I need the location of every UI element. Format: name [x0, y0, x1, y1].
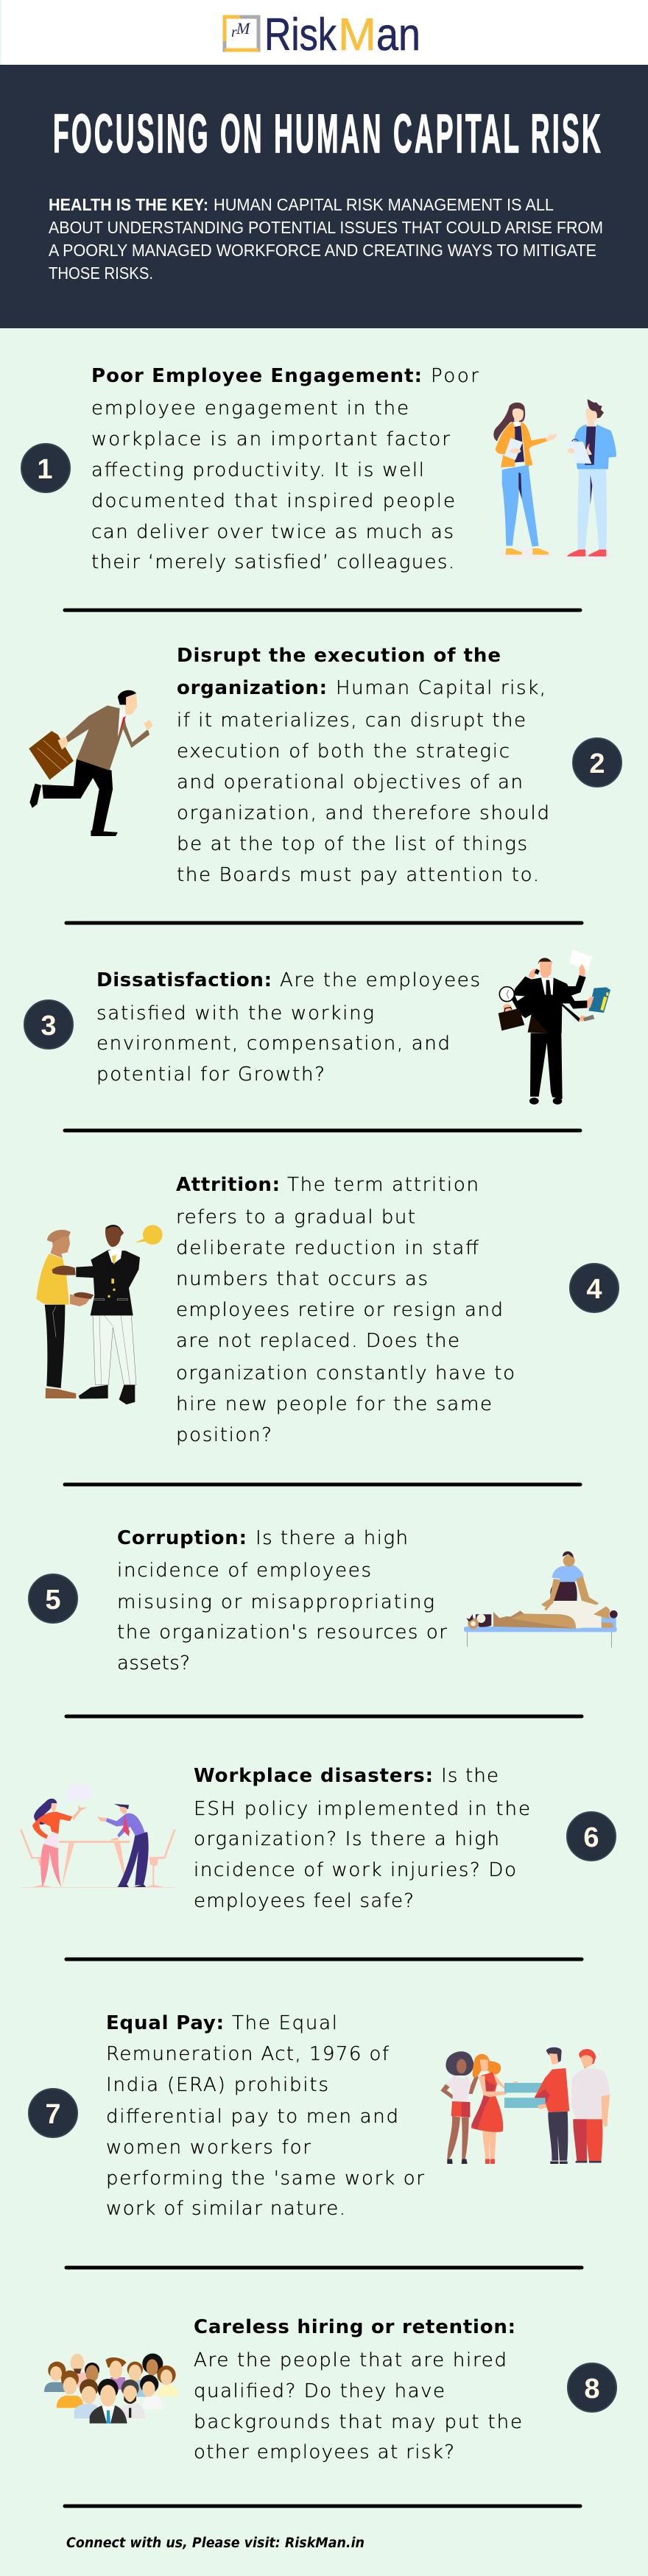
text block 2: if it materializes, can disrupt the	[177, 710, 526, 732]
text block 4: are not replaced. Does the	[176, 1330, 459, 1352]
illustration: running businessman with briefcase	[29, 690, 153, 836]
panel: header	[0, 65, 648, 328]
text block 6: Is the	[441, 1765, 499, 1787]
text block 4: hire new people for the same	[176, 1393, 492, 1415]
logo: RiskMan: M	[236, 19, 251, 38]
panel: 6 workplace disasters	[21, 1765, 616, 1912]
text block 3: potential for Growth?	[96, 1064, 325, 1086]
text block 7: India (ERA) prohibits	[106, 2074, 328, 2096]
text block 8: other employees at risk?	[194, 2441, 454, 2463]
text block 8: Are the people that are hired	[194, 2349, 507, 2371]
badge 1: 1	[37, 454, 53, 485]
intro text: HEALTH IS THE KEY:	[49, 195, 208, 214]
text block 8	[194, 2316, 522, 2463]
logo: RiskMan: Risk	[264, 10, 337, 60]
text block 3: satisfied with the working	[96, 1002, 374, 1025]
text block 5: Is there a high	[256, 1527, 408, 1549]
badge 2	[573, 738, 621, 787]
text block 4: numbers that occurs as	[176, 1268, 428, 1290]
text block 5: misusing or misappropriating	[117, 1591, 434, 1613]
text block 2	[177, 645, 549, 886]
illustration: massage table	[464, 1551, 618, 1648]
text block 3: environment, compensation, and	[96, 1033, 450, 1055]
panel: 7 equal pay	[29, 2012, 610, 2220]
intro text: THOSE RISKS.	[49, 263, 153, 283]
intro text: ABOUT UNDERSTANDING POTENTIAL ISSUES THAT COULD ARISE FROM	[49, 218, 603, 237]
badge 7	[29, 2089, 77, 2137]
text block 7: The Equal	[232, 2012, 337, 2034]
badge 5	[29, 1574, 77, 1623]
text block 7: performing the 'same work or	[106, 2168, 424, 2190]
logo: RiskMan: an	[376, 10, 420, 60]
text block 7	[106, 2012, 424, 2220]
text block 6: employees feel safe?	[194, 1890, 414, 1912]
intro text	[49, 195, 603, 283]
text block 1	[91, 365, 479, 573]
text block 6	[194, 1765, 530, 1912]
text block 1: can deliver over twice as much as	[91, 521, 454, 543]
text block 2: the Boards must pay attention to.	[177, 864, 539, 886]
badge 3	[24, 1000, 73, 1049]
panel: 4 attrition	[36, 1174, 619, 1446]
text block 7: women workers for	[106, 2137, 311, 2159]
badge 7: 7	[45, 2099, 61, 2130]
text block 5: incidence of employees	[117, 1560, 371, 1582]
text block 1: workplace is an important factor	[91, 428, 450, 450]
footer: connect line: Connect with us, Please visit: RiskMan.in	[66, 2536, 364, 2551]
text block 2: Disrupt the execution of the	[177, 645, 501, 667]
illustration: argument at table	[21, 1784, 175, 1888]
intro text: A POORLY MANAGED WORKFORCE AND CREATING WAYS TO MITIGATE	[49, 241, 596, 260]
badge 4: 4	[586, 1274, 602, 1305]
illustration: two colleagues talking	[493, 399, 616, 561]
text block 5	[117, 1527, 447, 1674]
text block 3: Dissatisfaction:	[96, 969, 272, 991]
text block 1: Poor Employee Engagement:	[91, 365, 422, 387]
text block 6: incidence of work injuries? Do	[194, 1859, 516, 1881]
text block 2: and operational objectives of an	[177, 771, 523, 793]
text block 8: Careless hiring or retention:	[194, 2316, 515, 2338]
text block 7: Equal Pay:	[106, 2012, 224, 2034]
text block 7: work of similar nature.	[106, 2198, 345, 2220]
illustration: handshake between two men	[36, 1225, 163, 1404]
text block 4: deliberate reduction in staff	[176, 1237, 479, 1259]
text block 2: organization:	[177, 677, 327, 699]
text block 1: Poor	[431, 365, 479, 387]
badge 2: 2	[589, 749, 605, 779]
text block 3: Are the employees	[280, 969, 480, 991]
text block 4: Attrition:	[176, 1174, 280, 1196]
panel: 8 careless hiring	[44, 2316, 616, 2463]
text block 5: the organization's resources or	[117, 1621, 447, 1643]
badge 4	[570, 1264, 619, 1312]
text block 4	[176, 1174, 515, 1446]
badge 6: 6	[583, 1822, 599, 1853]
text block 7: differential pay to men and	[106, 2106, 398, 2128]
text block 8: backgrounds that may put the	[194, 2411, 522, 2433]
text block 1: employee engagement in the	[91, 397, 409, 420]
illustration: four people holding equals sign	[440, 2048, 610, 2164]
illustration: crowd of employees	[44, 2354, 179, 2424]
badge 6	[567, 1812, 616, 1861]
logo: RiskMan: r	[231, 24, 237, 40]
panel: 2 disrupt the execution	[29, 645, 621, 886]
text block 5: assets?	[117, 1652, 190, 1674]
text block 4: position?	[176, 1424, 272, 1446]
text block 4: organization constantly have to	[176, 1362, 515, 1384]
text block 4: employees retire or resign and	[176, 1299, 503, 1321]
text block 4: The term attrition	[287, 1174, 479, 1196]
illustration: multitasking businessman	[499, 949, 610, 1105]
badge 8	[568, 2363, 616, 2412]
badge 8: 8	[584, 2374, 600, 2405]
text block 1: affecting productivity. It is well	[91, 459, 424, 481]
badge 1	[21, 444, 70, 492]
text block 2: organization, and therefore should	[177, 802, 549, 824]
intro text: HUMAN CAPITAL RISK MANAGEMENT IS ALL	[214, 195, 554, 214]
panel: 3 dissatisfaction	[24, 949, 610, 1105]
panel: 5 corruption	[29, 1527, 618, 1674]
text block 4: refers to a gradual but	[176, 1206, 415, 1228]
text block 2: Human Capital risk,	[336, 677, 546, 699]
text block 3	[96, 969, 480, 1086]
text block 5: Corruption:	[117, 1527, 247, 1549]
logo: RiskMan	[225, 10, 420, 60]
text block 6: Workplace disasters:	[194, 1765, 433, 1787]
text block 7: Remuneration Act, 1976 of	[106, 2043, 390, 2065]
text block 8: qualified? Do they have	[194, 2380, 445, 2402]
panel: 1 poor employee engagement	[21, 365, 616, 573]
text block 1: documented that inspired people	[91, 490, 455, 512]
logo: RiskMan: M	[338, 10, 376, 60]
text block 6: ESH policy implemented in the	[194, 1798, 530, 1820]
text block 6: organization? Is there a high	[194, 1828, 499, 1850]
text block 2: execution of both the strategic	[177, 740, 510, 762]
text block 1: their ‘merely satisfied’ colleagues.	[91, 551, 454, 573]
badge 5: 5	[45, 1585, 61, 1616]
badge 3: 3	[40, 1011, 57, 1041]
text block 2: be at the top of the list of things	[177, 833, 527, 855]
